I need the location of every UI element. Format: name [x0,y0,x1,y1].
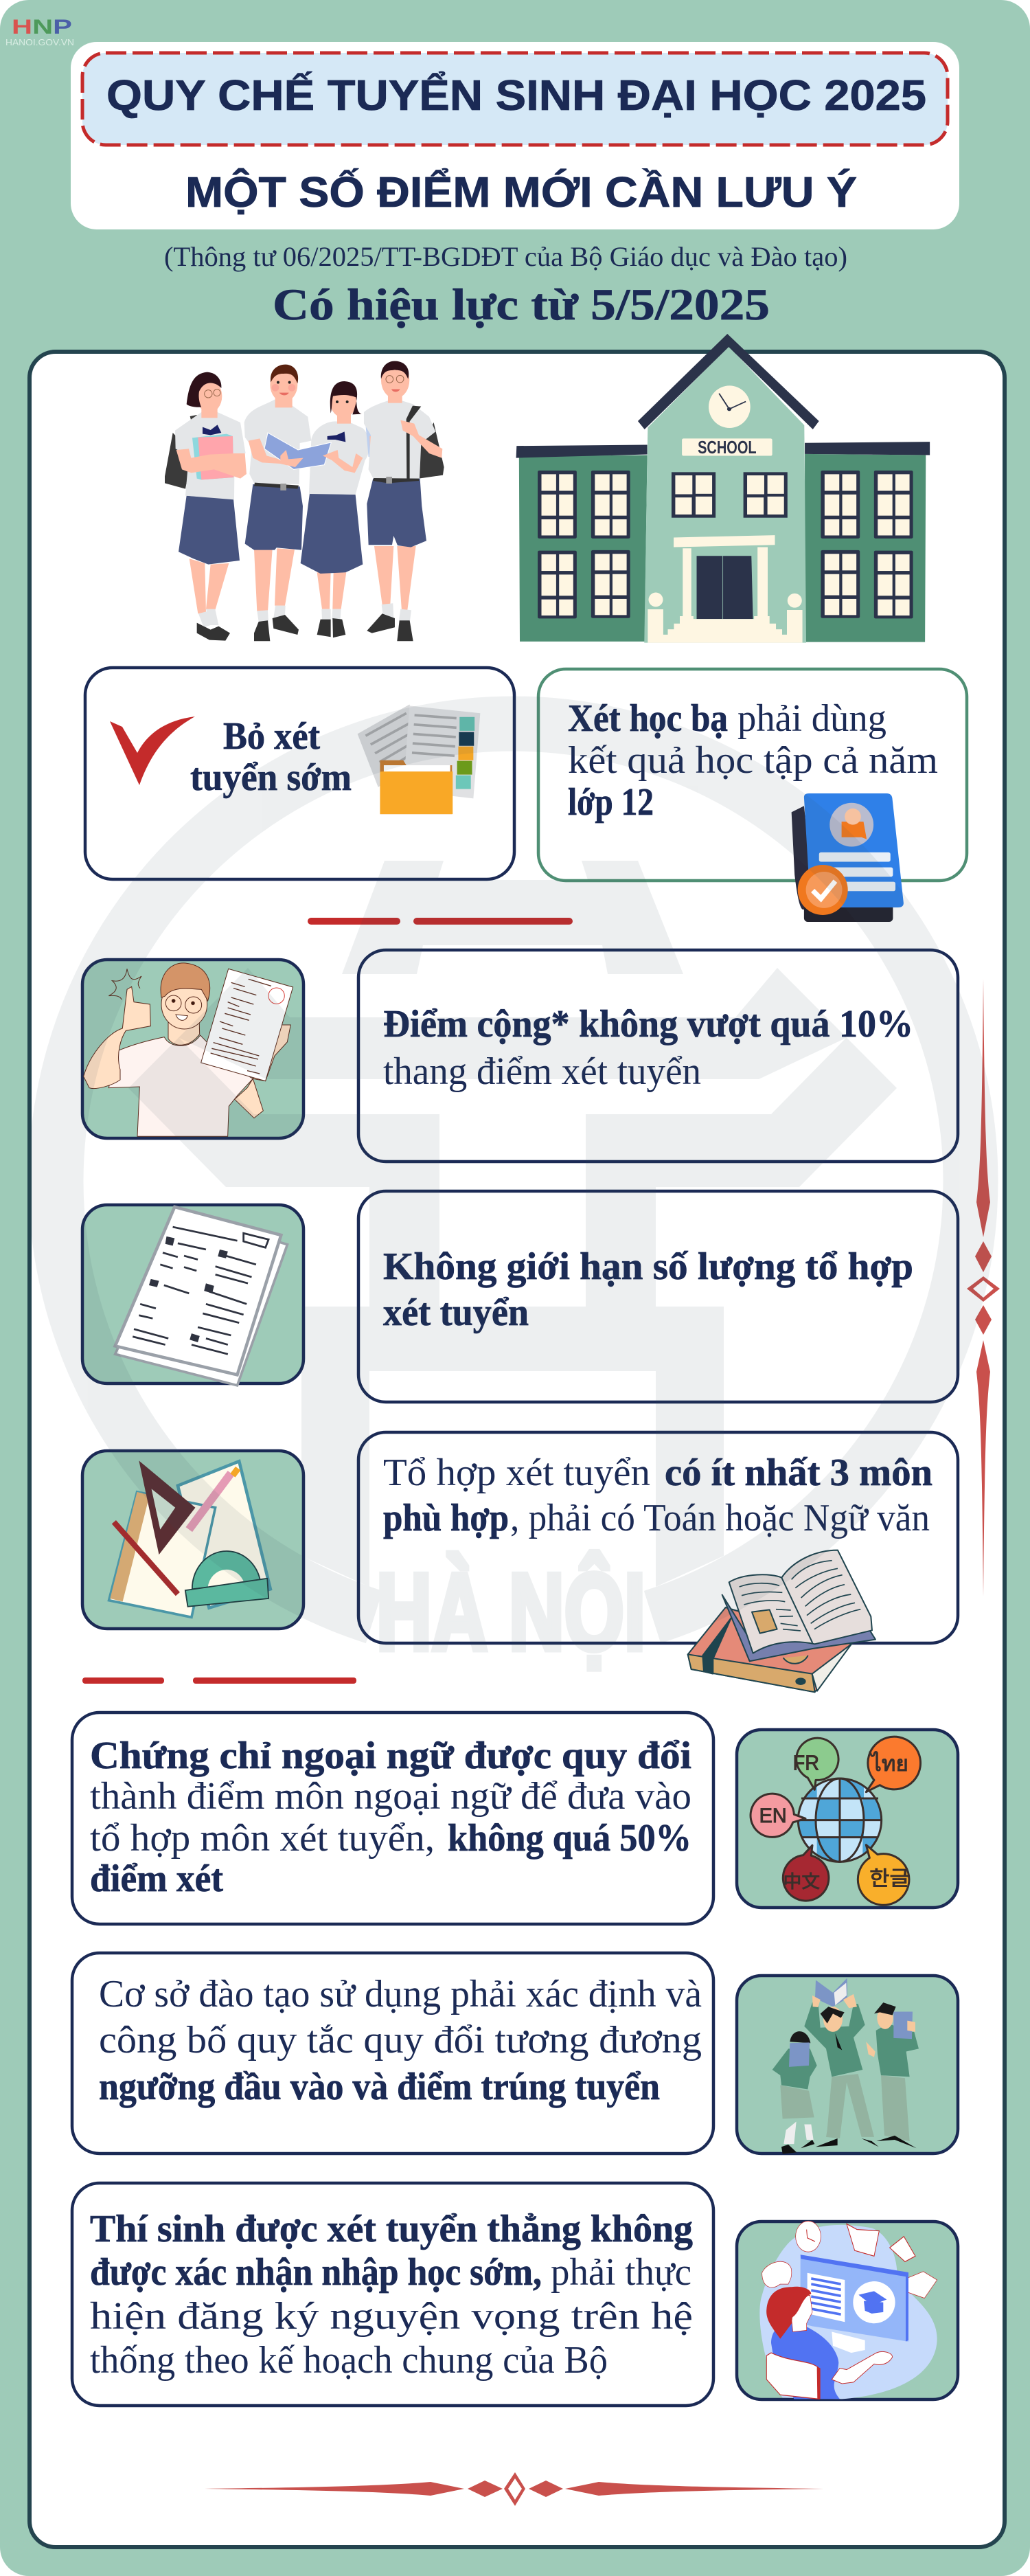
language labels: ไทย [869,1751,908,1776]
icon tile: globe with language bubbles [737,1730,958,1908]
language labels: 한글 [869,1868,910,1890]
card: ngoại ngữ text [72,1713,713,1924]
row: xét tuyển thẳng [72,2183,958,2406]
row: ít nhất 3 môn [82,1432,958,1692]
card: 3 môn text: Tổ hợp xét tuyển [383,1451,650,1494]
card: xét tuyển thẳng text: được xác nhận nhập học sớm, [90,2251,542,2294]
card text: kết quả học tập cả năm [568,739,938,782]
title banner: QUY CHẾ TUYỂN SINH ĐẠI HỌC 2025 [106,72,926,120]
card: quy đổi text: công bố quy tắc quy đổi tương đương [99,2019,702,2061]
card: 3 môn text: có ít nhất 3 môn [665,1451,932,1494]
icon tile: girl at computer [737,2221,958,2399]
illustration: four students [165,361,444,641]
card: xét tuyển thẳng text [72,2183,713,2406]
language labels: 中文 [783,1871,820,1892]
card text: phải dùng [737,697,886,740]
row: điểm cộng [82,950,958,1162]
card text: Xét học bạ [568,697,728,740]
card: xét tuyển thẳng text: Thí sinh được xét tuyển thẳng không [90,2208,693,2250]
ornament: horizontal red divider [205,2472,824,2506]
icon tile: stack of exam papers [82,1205,304,1386]
icon tile: boy with test paper [82,960,304,1138]
icon: stack of books [688,1550,876,1692]
icon: red check mark [110,716,195,785]
watermark: Hà Nội emblem: HÀ NỘI [376,1552,645,1673]
header card [71,42,959,229]
logo: HNP: HANOI.GOV.VN [5,37,74,47]
title banner [82,53,948,145]
language labels: FR [793,1751,819,1774]
card: giới hạn tổ hợp text [358,1191,958,1402]
divider: red dashes [82,1677,356,1684]
card: ngoại ngữ text: không quá 50% [448,1817,691,1860]
icon: student record book with badge [792,793,904,922]
legal reference line: (Thông tư 06/2025/TT-BGDĐT của Bộ Giáo dục và Đào tạo) [164,241,847,272]
icon tile: math tools [82,1451,304,1629]
row: chứng chỉ ngoại ngữ [72,1713,958,1924]
card: xét tuyển thẳng text: hiện đăng ký nguyện vọng trên hệ [90,2295,693,2338]
language labels [759,1751,910,1892]
watermark: Hà Nội emblem [56,724,971,1673]
card: xét tuyển thẳng text: thống theo kế hoạch chung của Bộ [90,2339,608,2382]
card: điểm cộng text: Điểm cộng* không vượt quá 10% [383,1003,913,1046]
card: quy đổi text [72,1953,713,2154]
ornament: vertical red divider [967,979,1000,1596]
card: ngoại ngữ text: Chứng chỉ ngoại ngữ được quy đổi [90,1735,691,1777]
icon tile: three students in green blazers [737,1976,958,2154]
card: điểm cộng text [358,950,958,1162]
card: Xét học bạ [538,669,967,922]
card text: Bỏ xét [223,715,320,758]
card: quy đổi text: ngưỡng đầu vào và điểm trúng tuyển [99,2066,660,2108]
effective date heading: Có hiệu lực từ 5/5/2025 [273,280,770,330]
card: 3 môn text: phù hợp [383,1497,509,1539]
school sign text: SCHOOL [698,438,757,457]
card: xét tuyển thẳng text: phải thực [551,2251,691,2294]
card: ngoại ngữ text: thành điểm môn ngoại ngữ để đưa vào [90,1775,691,1818]
card: điểm cộng text: thang điểm xét tuyển [383,1050,701,1093]
logo: HNP [5,16,74,47]
card text [568,697,938,824]
card: giới hạn tổ hợp text: Không giới hạn số lượng tổ hợp [383,1245,913,1288]
row: quy đổi tương đương [72,1953,958,2154]
card: ngoại ngữ text: tổ hợp môn xét tuyển, [90,1817,435,1860]
card: 3 môn text: , phải có Toán hoặc Ngữ văn [510,1497,930,1539]
card: 3 môn text [358,1432,958,1643]
card text: tuyển sớm [190,756,352,799]
card text [190,715,352,799]
card: giới hạn tổ hợp text: xét tuyển [383,1291,529,1334]
icon: folder with documents [358,705,480,814]
subtitle: MỘT SỐ ĐIỂM MỚI CẦN LƯU Ý [185,169,857,216]
illustration: school building [516,334,930,643]
card text: lớp 12 [568,781,654,824]
divider: red dashes [308,918,573,925]
row: tổ hợp không giới hạn [82,1191,958,1402]
card: ngoại ngữ text: điểm xét [90,1857,223,1900]
card: quy đổi text: Cơ sở đào tạo sử dụng phải xác định và [99,1973,702,2015]
card: Bỏ xét tuyển sớm [85,668,514,879]
logo: HNP: H N P [12,16,72,38]
language labels: EN [759,1805,787,1827]
